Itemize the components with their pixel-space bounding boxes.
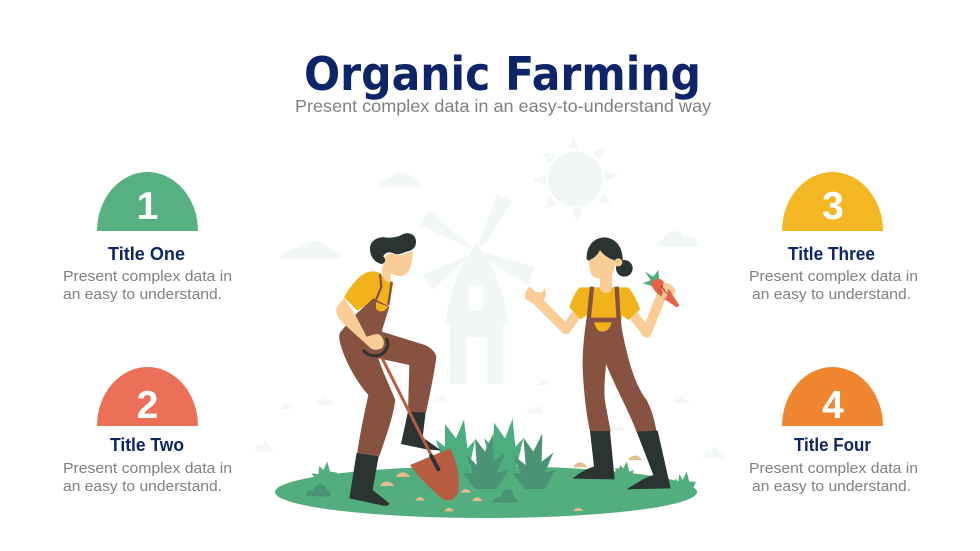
woman: right arm	[633, 295, 662, 333]
man: near boot	[349, 453, 389, 506]
illustration: faded background scene	[279, 137, 698, 385]
description: item three: Present complex data in	[749, 268, 918, 285]
figure: woman with carrot	[525, 237, 679, 489]
description: item four: Present complex data in	[749, 460, 918, 477]
heading: title one: Title One	[108, 244, 185, 264]
man: neck and face	[382, 251, 413, 283]
figure: man with shovel	[336, 233, 459, 506]
man: shirt	[344, 271, 393, 311]
soil mounds	[380, 472, 482, 511]
woman: face	[589, 250, 615, 279]
badge: number 3	[782, 172, 883, 231]
man: straps	[376, 274, 392, 305]
woman: pocket	[594, 322, 612, 332]
woman: ear	[614, 258, 622, 266]
description: item two: an easy to understand.	[63, 478, 222, 495]
bush: dark left	[463, 433, 508, 489]
icon: sun	[533, 137, 618, 221]
icon: cloud right	[656, 231, 698, 246]
bush: light back right	[484, 418, 523, 473]
grass tuft right	[675, 472, 696, 492]
man: hair	[370, 233, 416, 264]
ground	[275, 466, 697, 518]
badge: number 4	[782, 367, 883, 427]
badge: number 4: 4	[822, 384, 844, 427]
panel: item one	[63, 172, 232, 303]
heading: title four: Title Four	[794, 435, 871, 455]
illustration: ground details	[306, 462, 482, 511]
description: item one: Present complex data in	[63, 268, 232, 285]
bush: dark right	[513, 433, 556, 489]
subtitle: Present complex data in an easy-to-understand way	[295, 96, 711, 116]
small shrub	[493, 489, 517, 503]
illustration: bushes	[436, 418, 556, 503]
woman: shirt	[569, 287, 640, 320]
illustration: faded grass tufts	[254, 379, 725, 458]
woman: boots	[573, 431, 671, 489]
shrub left	[306, 484, 331, 497]
man: overalls	[339, 298, 436, 456]
carrot	[643, 270, 679, 307]
woman: hair bun	[616, 260, 633, 277]
illustration: ground details right	[573, 455, 696, 511]
soil mounds right	[573, 455, 642, 511]
woman: straps	[589, 287, 619, 320]
description: item four: an easy to understand.	[752, 478, 911, 495]
woman: raised hand	[525, 286, 546, 304]
shovel	[364, 339, 459, 500]
woman: left arm	[535, 298, 576, 329]
badge: number 2: 2	[137, 384, 158, 427]
man: pocket	[376, 302, 388, 311]
grass tuft middle	[615, 462, 634, 480]
icon: cloud top	[380, 172, 421, 187]
panel: item three	[749, 172, 918, 303]
heading: title three: Title Three	[788, 244, 875, 264]
grass tuft left	[312, 462, 337, 482]
badge: number 1	[97, 172, 198, 231]
panel: item four	[749, 367, 918, 495]
description: item three: an easy to understand.	[752, 286, 911, 303]
heading: title two: Title Two	[110, 435, 184, 455]
bush: light back left	[436, 419, 475, 473]
description: item two: Present complex data in	[63, 460, 232, 477]
woman: neck	[600, 275, 612, 293]
woman: hair	[587, 237, 623, 262]
description: item one: an easy to understand.	[63, 286, 222, 303]
woman: overalls	[583, 318, 657, 432]
icon: windmill	[421, 195, 534, 385]
title: Organic Farming	[304, 47, 701, 101]
man: far boot	[401, 410, 441, 451]
icon: cloud left	[279, 242, 342, 258]
badge: number 3: 3	[822, 185, 844, 228]
panel: item two	[63, 367, 232, 495]
badge: number 2	[97, 367, 198, 427]
man: arm	[336, 298, 384, 350]
badge: number 1: 1	[137, 185, 158, 228]
